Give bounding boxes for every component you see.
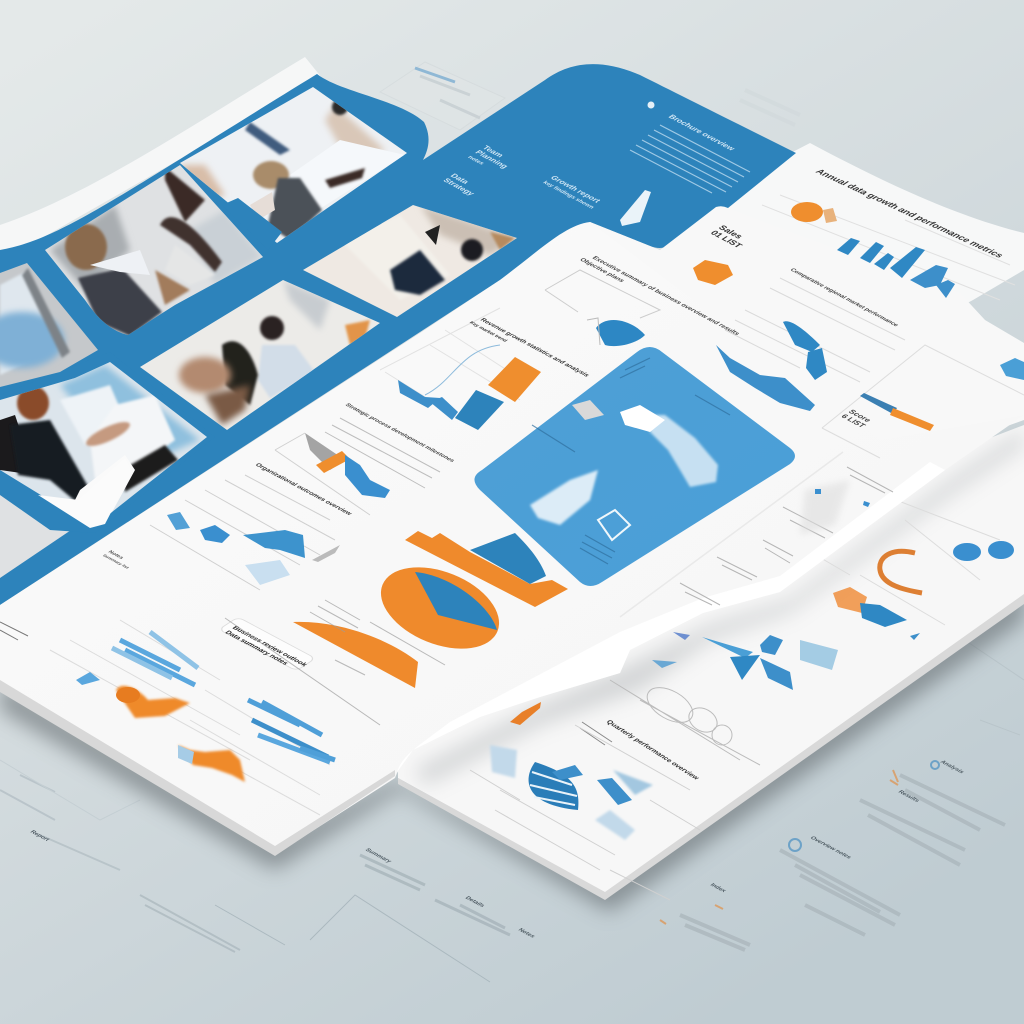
background small labels: Details — [463, 896, 486, 909]
bar chart: orange and blue big — [398, 345, 541, 430]
orange triangle — [293, 622, 418, 688]
chart: orange and blue bars — [833, 587, 920, 640]
map: solid white — [620, 405, 665, 432]
main sheet contents — [0, 253, 893, 815]
heading: middle-left label: Sales — [716, 224, 745, 240]
photo: woman with red hair — [0, 362, 207, 514]
map: white mark — [598, 510, 630, 540]
icon: orange hex — [693, 260, 733, 285]
small text block 1 — [466, 144, 518, 174]
frame lines: bottom sheet — [790, 490, 1000, 625]
text lines: knife — [325, 418, 440, 488]
background small labels — [28, 760, 966, 939]
chart: blue stacked globe — [529, 762, 578, 810]
blue tab overlapping photos — [222, 198, 282, 250]
bar chart: top right — [837, 238, 955, 298]
heading: blue panel white text: Brochure overview — [666, 113, 738, 152]
small text block 1: Team — [480, 144, 506, 159]
icon: right edge blue blob — [1000, 358, 1024, 380]
bottom sheet contents — [470, 490, 1014, 900]
background small labels: Summary — [363, 848, 393, 864]
icons: small blue marks — [815, 489, 870, 507]
chart: blue small shapes — [167, 512, 340, 585]
panel: blue lower-left photo frame — [0, 352, 215, 533]
heading: left edge: Summary list — [102, 554, 131, 570]
small text block 2: Data — [448, 172, 472, 186]
page thickness: main sheet — [0, 680, 395, 856]
small blue blob — [76, 672, 100, 685]
small text block 2: Strategy — [441, 177, 477, 197]
background small labels: Index — [708, 883, 728, 894]
heading: middle-left label: 01 LIST — [708, 229, 745, 250]
heading: chart: Key market trend — [468, 321, 508, 343]
icon: blue discs — [953, 541, 1014, 561]
subheading: bottom sheet — [580, 722, 612, 745]
heading: middle: Comparative regional market performance — [788, 268, 900, 328]
heading: middle-left label — [708, 224, 753, 250]
grid lines — [50, 620, 330, 815]
text lines: centre — [225, 600, 445, 725]
photo: two people talking — [45, 165, 263, 335]
map: pale shape upper — [645, 415, 718, 487]
chart: blue shapes — [716, 321, 827, 411]
chart: orange splash — [116, 686, 190, 718]
chart: blue splashes — [490, 745, 653, 840]
chart: knife — [305, 433, 390, 498]
heading: top right page: Annual data growth and performance metrics — [813, 168, 1006, 259]
background small labels: Notes — [516, 928, 537, 939]
shadow: under fold — [415, 430, 1024, 785]
photo: left monitor — [0, 263, 98, 387]
panel: main sheet — [0, 222, 1024, 855]
map panel: blue — [474, 347, 795, 586]
heading: bottom sheet: Quarterly performance overview — [604, 719, 701, 781]
panel: grey area under photos — [0, 490, 80, 578]
shadow under sheets — [0, 585, 1024, 912]
smudge on flap — [800, 480, 850, 535]
paper cut-out under lower-left photo — [38, 458, 132, 528]
panel: blue cover with photos — [0, 64, 796, 605]
orange corner — [510, 702, 541, 725]
small text blocks on flap — [680, 467, 893, 605]
fold highlight — [397, 462, 945, 772]
small text block 1: Planning — [473, 149, 510, 170]
small text block 3: key findings shown — [541, 181, 595, 210]
chart: blue stripes lower — [248, 700, 335, 762]
text lines: left — [150, 475, 335, 590]
background small labels: Overview notes — [808, 836, 853, 860]
heading: top of page: Objective plans — [578, 257, 626, 284]
text block: centre small: Business review outlook — [230, 625, 308, 668]
blue wedge — [470, 533, 546, 584]
box outline — [822, 345, 1024, 458]
panel: middle right page — [590, 206, 1024, 475]
background small labels: Analysis — [938, 760, 966, 775]
text block: centre small: Data summary notes — [223, 630, 290, 666]
sketch outlines — [610, 680, 760, 765]
page thickness: bottom right sheet — [398, 594, 1024, 900]
icon: white pen — [620, 190, 651, 226]
label: progress — [839, 408, 875, 429]
heading: top of page: Executive summary of business overview and results — [590, 255, 741, 337]
panel: top right page — [700, 143, 1024, 360]
chart: blue stripes top-left — [112, 632, 198, 685]
pie chart — [369, 551, 511, 665]
small text block 3: Growth report — [548, 174, 603, 204]
heading: left: Organizational outcomes overview — [253, 462, 353, 516]
background small labels: Report — [28, 830, 50, 842]
white text block on blue cover — [441, 102, 750, 226]
icon: orange disc — [791, 202, 837, 223]
orange big bar — [405, 531, 568, 607]
heading: knife: Strategic process development milestones — [343, 403, 456, 464]
photo: group of three — [135, 275, 385, 435]
text lines: middle — [725, 278, 905, 382]
chart: central blue diagram — [652, 632, 838, 690]
map: white shape lower — [530, 470, 598, 525]
pill: centre text backing — [219, 617, 315, 671]
small text block 1: notes — [466, 155, 486, 166]
paragraph: blue panel body lines — [630, 125, 750, 193]
icon: small circle — [648, 102, 654, 108]
photo: woman at table — [180, 87, 407, 243]
background small labels: Results — [896, 790, 921, 804]
page seam — [620, 452, 843, 617]
heading: left edge — [102, 550, 137, 570]
photo: office group — [303, 205, 517, 317]
frame lines: chart — [380, 308, 530, 425]
text lines: bottom sheet — [470, 725, 700, 900]
label: progress: Score — [846, 408, 874, 424]
top right page contents — [762, 168, 1015, 300]
panel: bottom right sheet — [398, 425, 1024, 893]
heading: chart: Revenue growth statistics and analysis — [478, 317, 591, 378]
frame: knife — [275, 433, 370, 515]
small text block 2 — [441, 172, 484, 197]
chart: orange splash lower — [178, 745, 245, 782]
middle right page contents — [693, 224, 1024, 458]
progress bar — [860, 393, 934, 431]
heading: left edge: Notes — [106, 550, 125, 560]
map: icon — [572, 400, 604, 420]
heading: far left — [0, 622, 28, 640]
panel: back page top-left edge — [0, 57, 322, 262]
chart: orange arc — [880, 551, 922, 593]
label: progress: 6 LIST — [839, 413, 868, 429]
icon: blue drop — [587, 318, 645, 346]
map: text lines — [532, 358, 730, 564]
grid lines: top right — [762, 195, 1015, 300]
outline box — [545, 270, 660, 318]
